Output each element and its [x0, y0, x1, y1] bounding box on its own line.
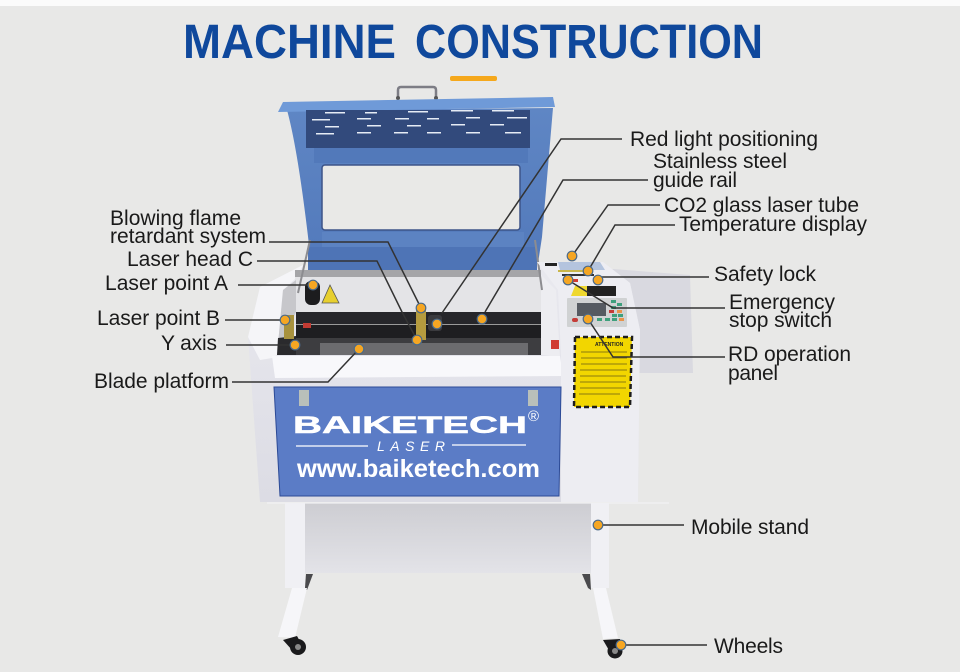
laser machine illustration [248, 87, 693, 658]
label: blowing flame retardant system [110, 207, 266, 248]
machine body [248, 262, 640, 502]
label: temperature display: Temperature display [679, 213, 868, 236]
label: laser point A: Laser point A [105, 272, 228, 295]
open lid [278, 97, 555, 270]
leader line: mobile stand [598, 524, 684, 526]
title: CONSTRUCTION [415, 16, 763, 69]
front brand panel: www.baiketech.com [296, 455, 540, 483]
leader line: RD operation panel [588, 319, 725, 357]
gas struts [298, 240, 542, 293]
lid handle [396, 87, 438, 100]
label: blade platform: Blade platform [94, 370, 229, 393]
leader line: blade platform [232, 349, 359, 382]
right wheel [603, 639, 622, 658]
leader line: blowing system [269, 242, 421, 308]
title: MACHINE [183, 16, 396, 69]
attention sticker [574, 337, 632, 407]
front brand panel: LASER [377, 438, 445, 454]
front brand panel [274, 387, 561, 496]
front brand panel: ® [528, 408, 539, 425]
label: wheels: Wheels [714, 635, 783, 658]
leader line: laser head C [257, 261, 417, 340]
label: safety lock: Safety lock [714, 263, 816, 286]
leader line: laser point A [238, 284, 313, 286]
left white flap [248, 265, 303, 360]
label: laser point B: Laser point B [97, 307, 220, 330]
leader line: Y axis [226, 344, 295, 346]
lid ventilation slots [312, 110, 527, 134]
leader line: CO2 tube [572, 205, 660, 256]
label: emergency stop switch: stop switch [729, 309, 832, 332]
label: emergency stop switch: Emergency [729, 291, 836, 314]
label: stainless steel guide rail [653, 150, 787, 192]
control housing: ATTENTION [595, 342, 624, 348]
laser head assembly [416, 310, 426, 340]
leader line: emergency stop [568, 280, 725, 308]
front lip [272, 356, 563, 378]
leader line: safety lock [598, 277, 709, 280]
label: stainless steel guide rail: Stainless steel [653, 150, 787, 173]
label: CO2 glass laser tube: CO2 glass laser tube [664, 194, 859, 217]
mobile stand [267, 502, 669, 639]
label: stainless steel guide rail: guide rail [653, 169, 737, 192]
RD control panel [567, 298, 627, 327]
callout dots [280, 251, 626, 650]
label: red light positioning: Red light positioning [630, 128, 818, 151]
leader line: red light positioning [442, 139, 622, 313]
leader line: laser point B [225, 319, 285, 321]
work chamber [277, 270, 560, 357]
laser warning sticker [322, 285, 339, 303]
leader line: wheels [621, 644, 707, 646]
tube end cap [305, 281, 320, 305]
label: mobile stand: Mobile stand [691, 516, 809, 539]
warning stickers [571, 286, 587, 296]
label: RD operation panel [728, 343, 851, 385]
label: blowing flame retardant system: retardant system [110, 225, 266, 248]
title [183, 16, 763, 69]
front brand panel: BAIKETECH [293, 412, 527, 439]
side panel behind machine [600, 268, 693, 373]
left wheel [283, 636, 306, 655]
leader line: stainless steel guide rail [485, 180, 648, 312]
label: Y axis: Y axis [161, 332, 217, 355]
control housing [537, 262, 640, 502]
label: RD operation panel: panel [728, 362, 778, 385]
label: emergency stop switch [729, 291, 836, 332]
leader line: temperature display [588, 225, 675, 271]
label: laser head C: Laser head C [127, 248, 253, 271]
title accent bar [450, 76, 497, 81]
label: RD operation panel: RD operation [728, 343, 851, 366]
label: blowing flame retardant system: Blowing flame [110, 207, 241, 230]
